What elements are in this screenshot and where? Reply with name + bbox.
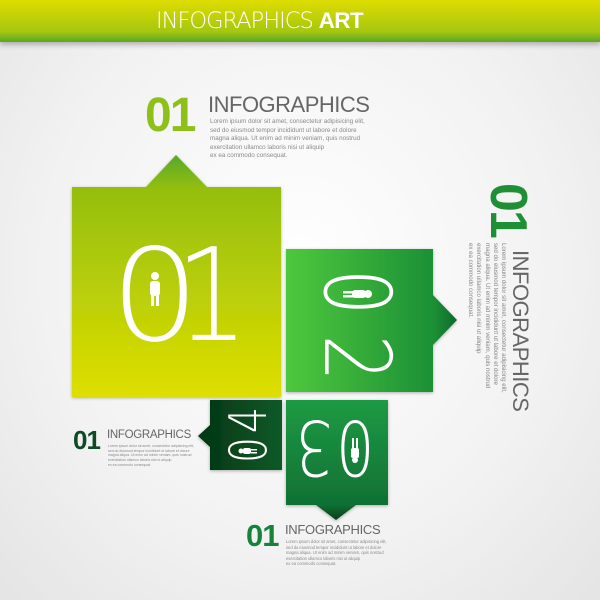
number 01: 0 xyxy=(110,221,200,370)
number 01: 01 xyxy=(145,89,194,142)
number 04: 4 xyxy=(219,407,279,433)
body text: magna aliqua. Ut enim ad minim veniam, quis nostrud xyxy=(210,135,360,142)
heading: INFOGRAPHICS xyxy=(285,522,380,537)
text block: bottom xyxy=(246,518,387,566)
body text: exercitation ullamco laboris nisi ut aliquip xyxy=(475,243,482,353)
text block: left xyxy=(73,425,194,467)
body text: ex ea commodo consequat. xyxy=(210,152,287,159)
icon: person xyxy=(343,290,372,298)
icon: person xyxy=(238,448,257,454)
body text: sed do eiusmod tempor incididunt ut labore et dolore xyxy=(108,449,190,453)
number 03 xyxy=(295,402,374,491)
body text: sed do eiusmod tempor incididunt ut labore et dolore xyxy=(492,243,499,385)
arrow up xyxy=(145,155,208,188)
box 02 xyxy=(286,249,457,392)
body text xyxy=(108,444,194,467)
body text xyxy=(210,118,365,159)
body text: exercitation ullamco laboris nisi ut aliquip xyxy=(286,556,360,561)
body text: ex ea commodo consequat. xyxy=(467,243,474,318)
box 04 xyxy=(198,400,282,470)
icon: person xyxy=(351,438,359,463)
body text: Lorem ipsum dolor sit amet, consectetur adipisicing elit, xyxy=(286,539,387,544)
body text: sed do eiusmod tempor incididunt ut labore et dolore xyxy=(210,126,357,134)
number 01: 1 xyxy=(175,221,249,370)
body text: Lorem ipsum dolor sit amet, consectetur adipisicing elit, xyxy=(210,118,365,125)
box 03 xyxy=(286,400,388,520)
arrow down xyxy=(316,505,356,520)
number 02 xyxy=(303,269,410,381)
arrow left xyxy=(198,425,210,447)
number 03: 3 xyxy=(295,402,333,491)
number 04: 0 xyxy=(219,437,279,463)
number 03: 0 xyxy=(336,402,374,491)
arrow right xyxy=(433,295,457,345)
number 01: 01 xyxy=(479,183,537,237)
heading: INFOGRAPHICS xyxy=(107,429,191,441)
heading: INFOGRAPHICS xyxy=(208,92,369,117)
body text: Lorem ipsum dolor sit amet, consectetur adipisicing elit, xyxy=(500,243,507,393)
text block: top xyxy=(145,89,369,159)
number 02: 2 xyxy=(303,335,410,381)
body text: magna aliqua. Ut enim ad minim veniam, quis nostrud xyxy=(286,550,384,555)
heading: INFOGRAPHICS xyxy=(508,250,533,411)
body text: ex ea commodo consequat. xyxy=(108,463,151,467)
box 01 xyxy=(72,155,281,397)
number 01 xyxy=(110,221,249,370)
text block: right rotated xyxy=(467,183,537,411)
body text xyxy=(286,539,387,566)
body text: sed do eiusmod tempor incididunt ut labore et dolore xyxy=(286,545,381,550)
title: INFOGRAPHICS ART xyxy=(156,8,363,34)
body text: magna aliqua. Ut enim ad minim veniam, quis nostrud xyxy=(108,453,191,457)
body text: magna aliqua. Ut enim ad minim veniam, quis nostrud xyxy=(484,243,491,388)
number 01: 01 xyxy=(246,518,278,553)
number 01: 01 xyxy=(73,425,100,455)
body text: exercitation ullamco laboris nisi ut aliquip xyxy=(210,144,324,150)
body text xyxy=(467,243,507,393)
number 04 xyxy=(219,407,279,463)
body text: ex ea commodo consequat. xyxy=(286,561,336,566)
number 02: 0 xyxy=(303,269,410,315)
body text: Lorem ipsum dolor sit amet, consectetur adipisicing elit, xyxy=(108,444,194,448)
body text: exercitation ullamco laboris nisi ut aliquip xyxy=(108,458,171,462)
header bar xyxy=(0,0,600,42)
icon: person xyxy=(150,272,160,306)
